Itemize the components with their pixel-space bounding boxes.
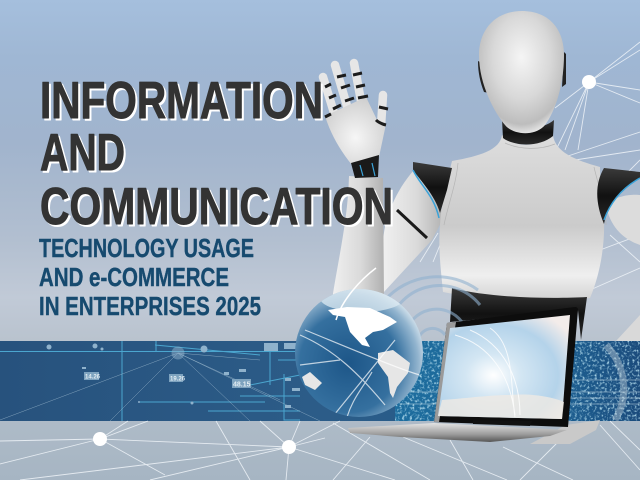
- robot lower right arm: [616, 315, 640, 341]
- title: INFORMATION: [42, 74, 325, 132]
- laptop lid: [434, 307, 578, 427]
- right shoulder trim: [604, 178, 640, 220]
- laptop: [348, 307, 600, 444]
- title: AND: [40, 124, 125, 182]
- robot neck: [502, 120, 554, 145]
- arm joint stripe: [397, 210, 427, 238]
- laptop base: [348, 423, 567, 442]
- data label 19.26: 19.26: [170, 376, 186, 382]
- title: COMMUNICATION: [42, 180, 395, 238]
- globe upper highlight: [322, 289, 400, 311]
- continent: north america: [328, 307, 397, 347]
- screen flare lines: [455, 328, 520, 417]
- left ear: [478, 61, 489, 93]
- subtitle: [39, 233, 261, 321]
- globe: [295, 268, 423, 425]
- textured teal band section: [395, 341, 640, 421]
- left shoulder pad: [413, 162, 452, 213]
- right ear: [562, 52, 566, 87]
- robot waist band: [450, 288, 587, 340]
- robot forearm: [332, 176, 384, 300]
- robot right arm: [606, 195, 640, 245]
- screen clouds: [438, 395, 564, 419]
- data label 19.26: [169, 374, 186, 382]
- globe light streaks: [300, 330, 420, 425]
- title: [40, 72, 395, 238]
- data label 14.26: 14.26: [85, 374, 101, 380]
- robot upper arm: [383, 170, 445, 293]
- network lines upper right: [420, 42, 640, 290]
- robot hand: [323, 63, 388, 165]
- laptop screen: [438, 315, 570, 419]
- laptop robot hand: [530, 420, 600, 444]
- robot: [323, 11, 640, 341]
- data band: [0, 341, 640, 421]
- subtitle: TECHNOLOGY USAGE: [39, 233, 254, 263]
- data label 48.15: [232, 379, 251, 388]
- network lines lower: [0, 421, 640, 480]
- robot torso: [439, 135, 604, 300]
- title: AND: [42, 126, 127, 184]
- signal rings: [385, 277, 480, 340]
- subtitle: AND e-COMMERCE: [39, 262, 229, 292]
- title: INFORMATION: [40, 72, 323, 130]
- robot head: [479, 11, 564, 133]
- subtitle: IN ENTERPRISES 2025: [39, 291, 261, 321]
- right shoulder pad: [597, 168, 640, 224]
- chest contour lines: [444, 143, 606, 225]
- network nodes: [93, 75, 596, 454]
- continent: south america: [378, 350, 410, 398]
- left shoulder trim: [413, 170, 439, 218]
- globe flare: [336, 268, 376, 320]
- title: COMMUNICATION: [40, 178, 393, 236]
- data label 48.15: 48.15: [233, 382, 251, 388]
- robot wrist: [351, 155, 379, 178]
- data label 14.26: [84, 372, 101, 380]
- continent: australia: [302, 372, 322, 390]
